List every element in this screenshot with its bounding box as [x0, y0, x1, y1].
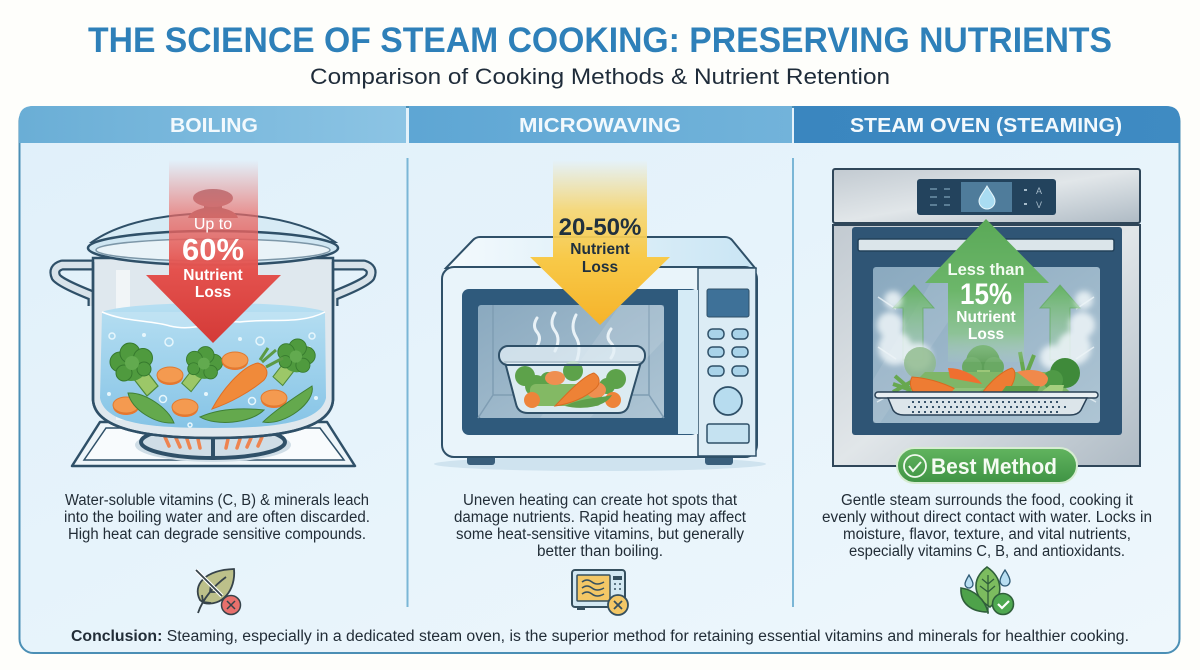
panel: steam oven: [822, 115, 1152, 614]
description: steam oven: evenly without direct contact with water. Locks in: [822, 509, 1152, 526]
control display with water drop: A: [1036, 186, 1042, 196]
arrow: up to 60% nutrient loss: 60%: [182, 232, 244, 267]
description: microwaving: [454, 492, 747, 560]
arrow: less than 15% nutrient loss: Less than: [947, 261, 1025, 279]
arrow: 20-50% nutrient loss: 20-50%: [559, 214, 641, 241]
description: boiling: [64, 492, 370, 543]
control display with water drop: V: [1036, 200, 1042, 210]
arrow: less than 15% nutrient loss: Loss: [968, 326, 1004, 343]
heading: boiling: BOILING: [170, 115, 258, 137]
arrow: 20-50% nutrient loss: [530, 160, 670, 325]
title: THE SCIENCE OF STEAM COOKING: PRESERVING NUTRIENTS: [88, 21, 1112, 60]
description: steam oven: Gentle steam surrounds the food, cooking it: [841, 492, 1134, 509]
description: boiling: Water-soluble vitamins (C, B) & minerals leach: [65, 492, 369, 509]
arrow: less than 15% nutrient loss: 15%: [960, 278, 1012, 311]
description: microwaving: better than boiling.: [537, 543, 663, 560]
icon: microwave warning: [572, 570, 628, 615]
glass dish with vegetables: [499, 346, 645, 413]
control display with water drop: [917, 179, 1056, 215]
arrow: less than 15% nutrient loss: [925, 219, 1049, 362]
arrow: up to 60% nutrient loss: Loss: [195, 284, 231, 301]
comparison frame: [19, 106, 1180, 653]
arrow: less than 15% nutrient loss: Nutrient: [956, 309, 1016, 326]
heading: microwaving: MICROWAVING: [519, 115, 681, 137]
description: boiling: into the boiling water and are often discarded.: [64, 509, 370, 526]
panel: boiling: [55, 115, 371, 614]
badge: best method: Best Method: [931, 454, 1057, 479]
description: steam oven: especially vitamins C, B, and antioxidants.: [849, 543, 1125, 560]
description: microwaving: some heat-sensitive vitamins, but generally: [456, 526, 744, 543]
description: steam oven: [822, 492, 1152, 560]
arrow: up to 60% nutrient loss: [146, 160, 281, 343]
subtitle: Comparison of Cooking Methods & Nutrient Retention: [310, 64, 890, 89]
illustration: pot on stove: [55, 189, 371, 466]
heading: steam oven: STEAM OVEN (STEAMING): [850, 115, 1122, 137]
badge: best method: [897, 448, 1077, 483]
steam clouds: [877, 291, 1095, 371]
arrow: up to 60% nutrient loss: Up to: [194, 216, 232, 233]
arrow: 20-50% nutrient loss: Nutrient: [570, 241, 630, 258]
description: microwaving: damage nutrients. Rapid heating may affect: [454, 509, 747, 526]
icon: damaged leaf: [196, 569, 240, 614]
icon: healthy leaves: [961, 567, 1014, 614]
description: microwaving: Uneven heating can create hot spots that: [463, 492, 738, 509]
illustration: microwave: [434, 237, 766, 471]
illustration: steam oven: [833, 169, 1140, 466]
description: boiling: High heat can degrade sensitive compounds.: [68, 526, 366, 543]
vegetables in water: [110, 339, 315, 423]
arrow: up to 60% nutrient loss: Nutrient: [183, 267, 243, 284]
tray with vegetables: [875, 345, 1098, 415]
conclusion: Conclusion: Steaming, especially in a dedicated steam oven, is the superior method for retaining essential vitamins and minerals for healthier cooking.: [71, 628, 1129, 645]
small steam arrows: [893, 285, 1080, 360]
arrow: 20-50% nutrient loss: Loss: [582, 259, 618, 276]
description: steam oven: moisture, flavor, texture, and vital nutrients,: [843, 526, 1131, 543]
panel: microwaving: [434, 115, 766, 615]
